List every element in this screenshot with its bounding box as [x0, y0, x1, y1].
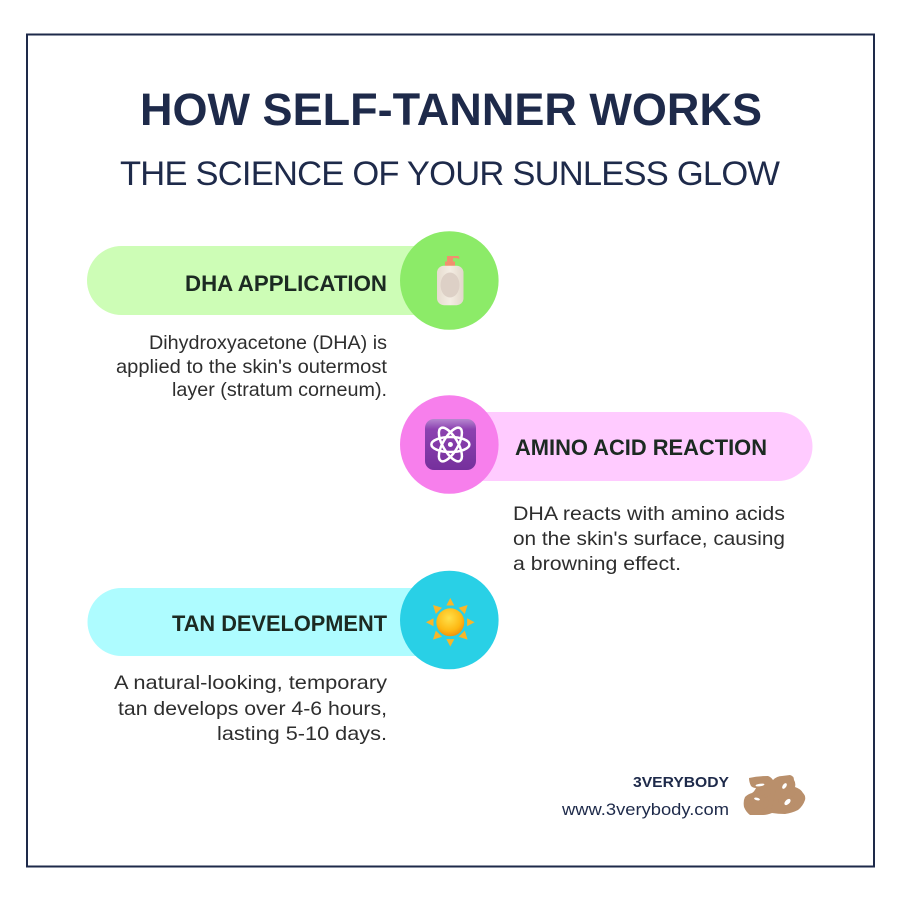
text: tan development description: A natural-looking, temporary — [114, 672, 387, 694]
logo: 3B — [744, 775, 805, 816]
footer: brand — [561, 774, 805, 819]
title: HOW SELF-TANNER WORKS — [140, 84, 762, 135]
heading pill: DHA application — [87, 246, 450, 315]
heading: DHA application: DHA APPLICATION — [185, 271, 387, 296]
text: DHA application description: Dihydroxyacetone (DHA) is — [149, 332, 387, 354]
text: tan development description — [114, 672, 387, 745]
panel: amino acid reaction — [400, 395, 813, 575]
heading pill: amino acid reaction — [449, 412, 813, 481]
panel: tan development — [88, 571, 499, 745]
text: DHA application description: applied to the skin's outermost — [116, 356, 388, 378]
text: amino acid description: DHA reacts with amino acids — [513, 503, 785, 525]
icon circle: blue — [400, 571, 499, 669]
icon: lotion bottle — [437, 256, 464, 305]
text: amino acid description: a browning effect. — [513, 553, 681, 575]
text: DHA application description: layer (stratum corneum). — [172, 379, 387, 401]
icon: sun — [426, 598, 475, 647]
icon: atom symbol — [425, 419, 476, 470]
text: tan development description: tan develops over 4-6 hours, — [118, 698, 387, 720]
panel: DHA application — [87, 231, 499, 401]
text: amino acid description — [513, 503, 785, 575]
icon circle: green — [400, 231, 499, 330]
heading: tan development: TAN DEVELOPMENT — [172, 611, 388, 636]
icon circle: pink — [400, 395, 499, 494]
website: www.3verybody.com — [561, 801, 729, 819]
heading pill: tan development — [88, 588, 450, 656]
text: amino acid description: on the skin's surface, causing — [513, 528, 785, 550]
text: tan development description: lasting 5-10 days. — [217, 723, 387, 745]
heading: amino acid reaction: AMINO ACID REACTION — [515, 435, 767, 460]
subtitle: THE SCIENCE OF YOUR SUNLESS GLOW — [120, 155, 780, 193]
brand name: 3VERYBODY — [633, 774, 729, 791]
logo: 3B: 3B — [751, 780, 797, 816]
text: DHA application description — [116, 332, 388, 401]
